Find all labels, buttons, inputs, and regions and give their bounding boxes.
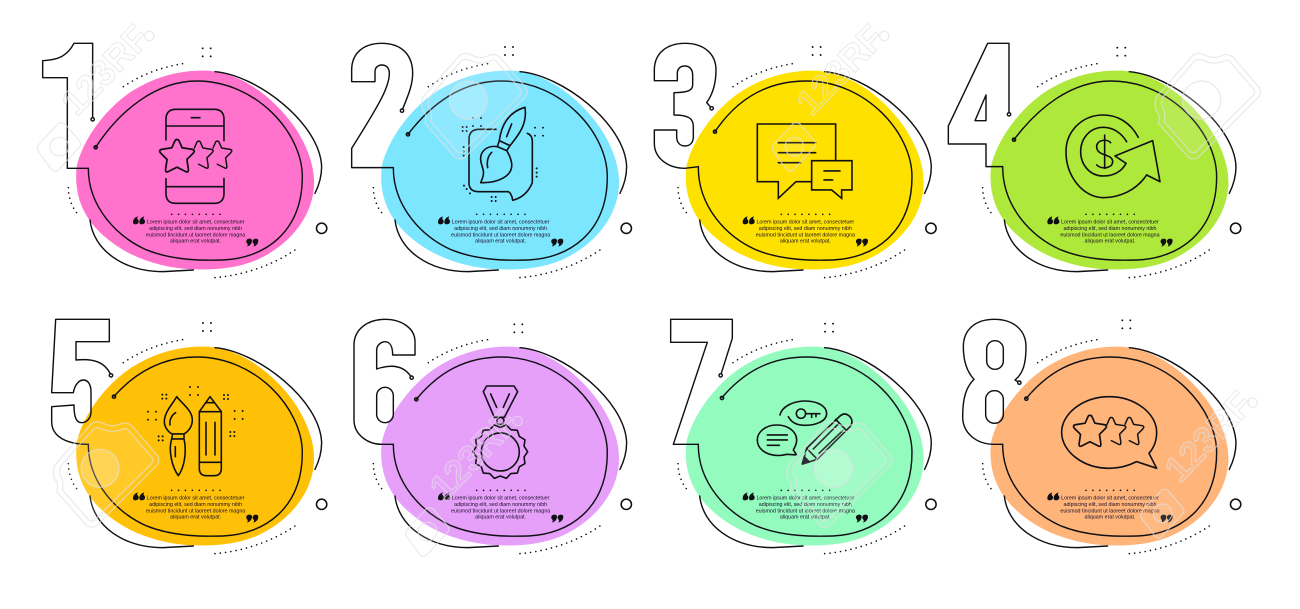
text block xyxy=(743,492,868,523)
dotted accents xyxy=(678,339,908,554)
scatter dots xyxy=(824,323,834,333)
text block xyxy=(1047,216,1173,247)
text block: aliquam erat volutpat. xyxy=(170,239,221,245)
numeral 5 xyxy=(52,319,111,444)
text block: Lorem ipsum dolor sit amet, consectetuer xyxy=(147,495,245,501)
text block: aliquam erat volutpat. xyxy=(475,515,526,521)
connector line xyxy=(698,357,912,536)
connector line xyxy=(1003,81,1217,260)
text block: euismod tincidunt ut laoreet dolore magna xyxy=(451,509,550,515)
text block: euismod tincidunt ut laoreet dolore magna xyxy=(146,509,245,515)
text block: Lorem ipsum dolor sit amet, consectetuer xyxy=(452,219,550,225)
end dots xyxy=(1018,381,1028,400)
blob: yellow xyxy=(686,71,924,269)
text block: aliquam erat volutpat. xyxy=(475,239,526,245)
scatter dots xyxy=(513,323,523,333)
text block: Lorem ipsum dolor sit amet, consectetuer xyxy=(1061,219,1159,225)
end dots xyxy=(400,109,410,136)
text block: adipiscing elit, sed diam nonummy nibh xyxy=(149,226,242,232)
text block: adipiscing elit, sed diam nonummy nibh xyxy=(1063,502,1157,508)
decorative outer arcs xyxy=(700,348,931,548)
scatter dots xyxy=(202,47,212,57)
text block: Lorem ipsum dolor sit amet, consectetuer xyxy=(756,495,854,501)
scatter dots xyxy=(202,322,212,332)
end dots xyxy=(109,374,116,398)
decorative outer arcs xyxy=(700,72,931,272)
ring marker xyxy=(1230,499,1241,509)
text block: adipiscing elit, sed diam nonummy nibh xyxy=(759,502,852,508)
dotted accents xyxy=(983,339,1213,554)
ring marker xyxy=(926,499,936,509)
panel 3: chat messages xyxy=(654,43,936,278)
text block: adipiscing elit, sed diam nonummy nibh xyxy=(454,502,547,508)
text block: euismod tincidunt ut laoreet dolore magna xyxy=(756,233,855,239)
icon: dollar refund arrow xyxy=(1066,115,1160,198)
text block: euismod tincidunt ut laoreet dolore magna xyxy=(756,509,855,515)
text block: Lorem ipsum dolor sit amet, consectetuer xyxy=(147,219,245,225)
text block: aliquam erat volutpat. xyxy=(780,515,831,521)
dotted accents xyxy=(68,63,298,278)
text block: Lorem ipsum dolor sit amet, consectetuer xyxy=(756,219,854,225)
ring marker xyxy=(1230,223,1241,233)
decorative outer arcs xyxy=(395,72,627,272)
text block: adipiscing elit, sed diam nonummy nibh xyxy=(1063,226,1157,232)
scatter dots xyxy=(812,46,822,56)
numeral 7 xyxy=(671,319,732,444)
text block: aliquam erat volutpat. xyxy=(1085,239,1135,245)
text block xyxy=(133,492,258,523)
end dots xyxy=(1007,113,1016,141)
panel 4: dollar refund xyxy=(948,43,1241,278)
ring marker xyxy=(621,499,631,509)
connector line xyxy=(393,357,607,536)
decorative outer arcs xyxy=(1004,348,1236,548)
text block: aliquam erat volutpat. xyxy=(780,239,831,245)
connector line xyxy=(393,81,607,260)
icon: brush and pencil xyxy=(147,386,244,476)
end dots xyxy=(710,107,717,133)
blob: mint xyxy=(686,347,924,545)
blob: peach xyxy=(990,347,1228,545)
connector line xyxy=(88,357,302,536)
text block xyxy=(438,216,563,247)
numeral 8 xyxy=(963,319,1026,444)
icon: paint brush in speech bubble xyxy=(462,107,544,202)
text block xyxy=(1047,492,1173,523)
ring marker xyxy=(316,223,327,233)
blob: green xyxy=(990,71,1228,269)
panel 5: brush and pencil xyxy=(52,319,327,554)
text block xyxy=(133,216,258,247)
decorative outer arcs xyxy=(395,348,627,548)
dotted accents xyxy=(983,63,1213,278)
text block: euismod tincidunt ut laoreet dolore magna xyxy=(1060,233,1160,239)
scatter dots xyxy=(504,46,514,56)
numeral 1 xyxy=(43,43,93,168)
text block: Lorem ipsum dolor sit amet, consectetuer xyxy=(1061,495,1159,501)
connector line xyxy=(1003,357,1217,536)
numeral 2 xyxy=(352,43,413,168)
numeral 6 xyxy=(354,319,415,444)
ring marker xyxy=(926,223,936,233)
scatter dots xyxy=(1116,47,1126,57)
decorative outer arcs xyxy=(1004,72,1236,272)
connector line xyxy=(88,81,302,260)
icon: phone with stars xyxy=(160,109,232,203)
decorative outer arcs xyxy=(90,348,322,548)
text block: adipiscing elit, sed diam nonummy nibh xyxy=(759,226,852,232)
text block: adipiscing elit, sed diam nonummy nibh xyxy=(149,502,242,508)
text block xyxy=(438,492,563,523)
blob: lilac xyxy=(381,347,619,545)
text block: adipiscing elit, sed diam nonummy nibh xyxy=(454,226,547,232)
panel 2: paint brush xyxy=(352,43,631,278)
icon: two speech bubbles xyxy=(757,124,852,198)
text block: Lorem ipsum dolor sit amet, consectetuer xyxy=(452,495,550,501)
end dots xyxy=(719,374,724,400)
connector line xyxy=(698,81,912,260)
text block: euismod tincidunt ut laoreet dolore magna xyxy=(146,233,245,239)
dotted accents xyxy=(678,63,908,278)
panel 7: key, chat and pencil xyxy=(671,319,936,554)
dotted accents xyxy=(373,339,603,554)
icon: speech bubble with stars xyxy=(1062,397,1157,468)
dotted accents xyxy=(373,63,603,278)
end dots xyxy=(91,118,97,149)
panel 6: medal xyxy=(354,319,631,554)
blob: amber xyxy=(76,347,314,545)
text block: euismod tincidunt ut laoreet dolore magna xyxy=(1060,509,1160,515)
text block: euismod tincidunt ut laoreet dolore magna xyxy=(451,233,550,239)
text block xyxy=(743,216,868,247)
ring marker xyxy=(621,223,631,233)
icon: medal xyxy=(473,386,528,478)
text block: aliquam erat volutpat. xyxy=(1085,515,1135,521)
dotted accents xyxy=(68,339,298,554)
text block: aliquam erat volutpat. xyxy=(170,515,221,521)
end dots xyxy=(410,376,418,401)
decorative outer arcs xyxy=(90,72,322,272)
scatter dots xyxy=(1121,319,1131,329)
panel 1: mobile rating xyxy=(43,43,327,278)
blob: blue xyxy=(381,71,619,269)
numeral 3 xyxy=(654,43,716,168)
icon: key, message and pencil xyxy=(757,401,852,464)
numeral 4 xyxy=(948,43,1009,167)
blob: pink xyxy=(76,71,314,269)
ring marker xyxy=(316,499,327,509)
panel 8: rating bubble xyxy=(963,319,1241,554)
